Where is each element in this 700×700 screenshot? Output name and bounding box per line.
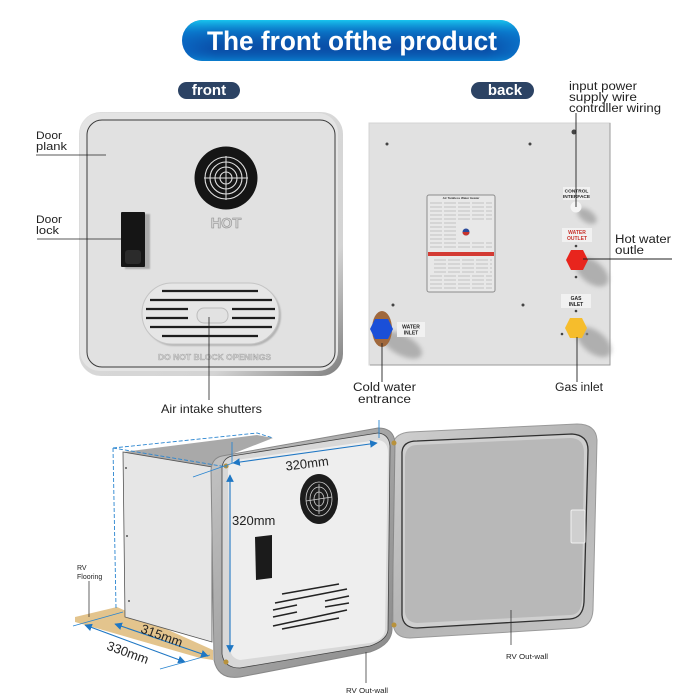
callout: RV out-wall under door frame: RV Out-wall (346, 688, 388, 695)
installation guide lines (73, 420, 379, 669)
callout: hot water outlet: Hot water (615, 234, 671, 246)
callout: input power and controller wiring (569, 81, 661, 207)
back tab label: back (488, 82, 523, 99)
callout: RV flooring (77, 565, 102, 617)
installed unit illustration (73, 420, 597, 677)
title text: The front ofthe product (207, 26, 497, 56)
gas inlet label and yellow fitting: GAS (571, 296, 582, 302)
water inlet label and blue fitting: INLET (404, 330, 418, 336)
callout: hot water outlet (583, 234, 672, 259)
exhaust vent on door (300, 474, 338, 524)
water outlet label and red fitting: OUTLET (567, 236, 587, 242)
vent slots on door (273, 584, 349, 629)
front tab label: front (192, 82, 226, 99)
door plank surface (87, 120, 335, 367)
callout: door lock: lock (36, 225, 60, 237)
gas inlet label and yellow fitting (561, 294, 591, 338)
heater box top (123, 435, 273, 467)
screws (386, 130, 588, 335)
icon: hot exhaust vent (194, 146, 258, 210)
connector shadows (378, 205, 617, 364)
dimension: inner depth: 315mm (139, 621, 185, 650)
embossed HOT text: HOT (211, 216, 241, 232)
callout: door lock (36, 214, 121, 239)
heater box side (123, 452, 212, 642)
closed door frame (211, 428, 395, 677)
callout: air intake shutters (161, 317, 262, 416)
panel: back of unit (369, 123, 617, 365)
back tab label (471, 82, 534, 99)
rating sticker: Air Tankless Water Heater (443, 196, 480, 200)
air intake vent (142, 283, 281, 346)
callout: input power and controller wiring: contrdller wiring (569, 103, 661, 115)
callout: door plank: Door (36, 130, 62, 142)
water outlet label and red fitting: WATER (568, 230, 586, 236)
RV flooring board (75, 607, 213, 660)
callout: gas inlet: Gas inlet (555, 382, 604, 394)
callout: door lock: Door (36, 214, 62, 226)
callout: RV out-wall under open door: RV Out-wall (506, 654, 548, 661)
gas inlet label and yellow fitting: INLET (569, 302, 583, 308)
callout: RV flooring: Flooring (77, 574, 102, 581)
open door panel (393, 424, 597, 638)
hinges (224, 440, 396, 664)
callout: cold water entrance (353, 343, 416, 406)
callout: cold water entrance: entrance (358, 394, 411, 406)
inner grey plate (405, 438, 584, 623)
embossed warning text: DO NOT BLOCK OPENINGS (158, 352, 271, 362)
callout: door plank: plank (36, 141, 68, 153)
callout: input power and controller wiring: input power (569, 81, 637, 93)
dimension arrows (85, 443, 377, 662)
dimension: door height: 320mm (232, 513, 275, 528)
callout: door plank (36, 130, 106, 155)
callout: RV flooring: RV (77, 565, 87, 572)
closed door white face (228, 440, 388, 660)
door lock (121, 212, 150, 269)
dimension: door width: 320mm (285, 453, 329, 474)
callout: RV out-wall under open door (506, 610, 548, 661)
door latch (571, 510, 585, 543)
callout: gas inlet (555, 337, 604, 394)
callout: RV out-wall under door frame (346, 652, 388, 695)
front tab label (178, 82, 240, 99)
title banner (182, 20, 520, 61)
dimension: box depth: 330mm (105, 638, 151, 667)
control interface label and port: INTERFACE (563, 194, 591, 200)
callout: air intake shutters: Air intake shutters (161, 402, 262, 416)
control interface label and port: CONTROL (565, 188, 588, 194)
callout: hot water outlet: outle (615, 245, 644, 257)
panel: front door (79, 112, 343, 376)
water outlet label and red fitting (562, 228, 592, 270)
callout: cold water entrance: Cold water (353, 382, 416, 394)
door lock on door (255, 535, 272, 580)
water inlet label and blue fitting: WATER (402, 324, 420, 330)
callout: input power and controller wiring: supply wire (569, 92, 637, 104)
water inlet label and blue fitting (370, 311, 425, 347)
control interface label and port (563, 187, 591, 212)
rating sticker (427, 195, 495, 292)
